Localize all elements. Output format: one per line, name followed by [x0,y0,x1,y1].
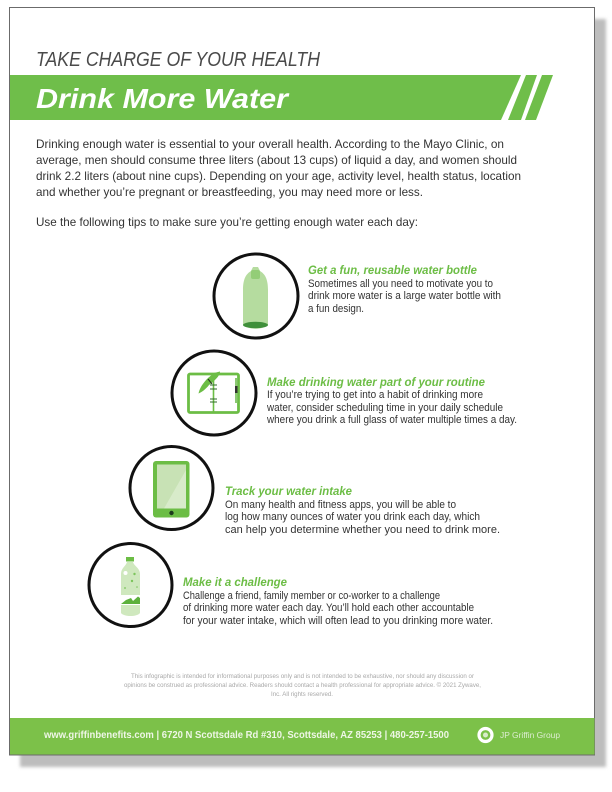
intro paragraph: and whether you’re pregnant or breastfeeding, you may need more or less. [36,185,423,199]
tip 2 text: where you drink a full glass of water multiple times a day. [266,414,517,426]
tip 2 text: Make drinking water part of your routine [267,377,486,389]
icon: reusable water bottle [214,254,298,338]
icon: tablet [130,446,213,530]
disclaimer: Inc. All rights reserved. [271,692,333,698]
tip 1 text [308,265,501,315]
intro paragraph: average, men should consume three liters (about 13 cups) of liquid a day, and women should [36,153,517,167]
disclaimer [124,674,481,698]
tips intro line: Use the following tips to make sure you’re getting enough water each day: [36,215,418,229]
tip 3 text: log how many ounces of water you drink each day, which [225,511,480,523]
tip 1 text: a fun design. [308,303,364,315]
footer bar [10,718,594,754]
tip 2 text [266,377,517,426]
footer contact text: www.griffinbenefits.com | 6720 N Scottsdale Rd #310, Scottsdale, AZ 85253 | 480-257-1500 [43,729,449,741]
tip 3 text: can help you determine whether you need to drink more. [225,524,500,536]
footer logo [479,728,561,742]
tip 3 text: Track your water intake [225,486,353,498]
intro paragraph: drink 2.2 liters (about nine cups). Depending on your age, activity level, health status, location [36,169,521,183]
tip 2 text: water, consider scheduling time in your daily schedule [266,402,503,414]
kicker heading: TAKE CHARGE OF YOUR HEALTH [36,48,320,71]
intro paragraph [36,137,521,199]
intro paragraph: Drinking enough water is essential to your overall health. According to the Mayo Clinic, on [36,137,504,151]
tip 2 text: If you’re trying to get into a habit of drinking more [267,389,483,401]
tip 4 text: Challenge a friend, family member or co-worker to a challenge [183,590,440,602]
icon: plastic bottle [89,544,172,626]
disclaimer: This infographic is intended for informational purposes only and is not intended to be exhaustive, nor should any discussion or [131,674,474,680]
footer logo: JP Griffin Group [500,731,561,740]
tip 4 text [183,577,493,627]
tip 3 text: On many health and fitness apps, you will be able to [225,499,456,511]
tip 4 text: Make it a challenge [183,577,288,589]
title banner [10,75,553,120]
tip 3 text [225,486,500,536]
tip 1 text: Sometimes all you need to motivate you to [308,278,493,290]
tip 4 text: of drinking more water each day. You’ll hold each other accountable [183,602,474,614]
icon: planner and pen [172,351,256,435]
tip 4 text: for your water intake, which will often lead to you drinking more water. [183,615,493,627]
title: Drink More Water [36,83,290,114]
tip 1 text: drink more water is a large water bottle with [308,290,501,302]
tip 1 text: Get a fun, reusable water bottle [308,265,478,277]
disclaimer: opinions be construed as professional advice. Readers should contact a health professional for appropriate advice. © 2021 Zywave, [124,682,481,689]
